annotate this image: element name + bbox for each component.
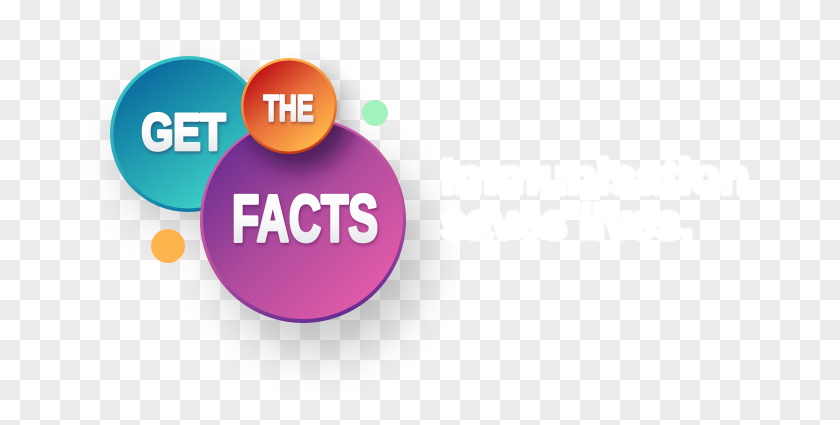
circle: FACTS [200,122,406,323]
decorative dot: orange [151,229,185,263]
circle: GET [110,56,266,212]
decorative dot: green [362,100,388,126]
tagline [441,150,749,248]
tagline line 2: saves lives. [441,195,693,248]
circle: THE [241,58,337,154]
shadow cast by THE circle [242,124,362,183]
tagline line 1: Immunisation [441,150,749,203]
label: GET: GET [142,104,226,160]
label: FACTS: FACTS [232,181,378,255]
label: THE: THE [264,88,314,128]
soft drop shadows [124,69,424,352]
